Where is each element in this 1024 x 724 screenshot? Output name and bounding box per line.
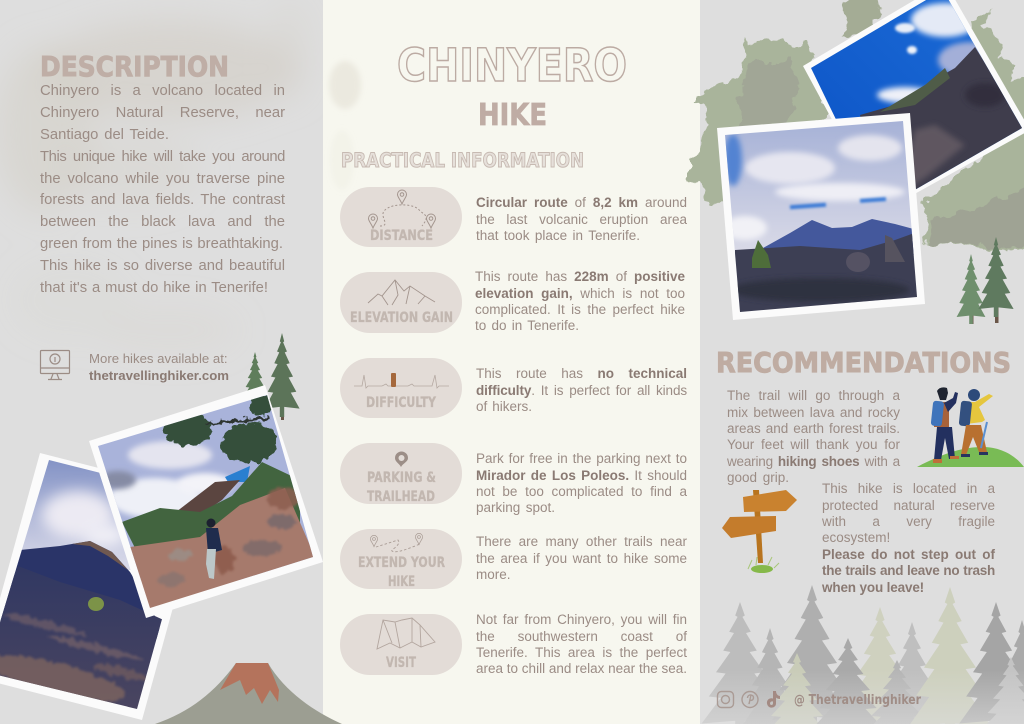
text block: parking: not be too complicated to find a bbox=[476, 484, 687, 499]
small pines: left bbox=[243, 333, 300, 420]
social handle: @ Thetravellinghiker bbox=[794, 692, 921, 708]
pill: distance: DISTANCE bbox=[370, 228, 433, 244]
background tree: upper left canopy bbox=[690, 38, 830, 206]
pill: elevation gain: ELEVATION GAIN bbox=[350, 310, 453, 326]
text block: difficulty: of hikers. bbox=[476, 399, 532, 414]
icon: pinterest bbox=[742, 692, 758, 708]
text block: parking: Park for free in the parking next to bbox=[476, 451, 687, 466]
pill: elevation gain bbox=[340, 272, 462, 333]
text block: difficulty: difficulty. It is perfect for all kinds bbox=[476, 382, 687, 398]
text block: elevation gain: to do in Tenerife. bbox=[475, 318, 579, 333]
text block: elevation gain: complicated. It is the perfect hike bbox=[475, 302, 685, 317]
text block: description: green from the pines is breathtaking. bbox=[40, 236, 283, 252]
text block: description: This hike is so diverse and beautiful bbox=[40, 258, 285, 274]
text block: more hikes link: More hikes available at: bbox=[89, 351, 228, 366]
text block: elevation gain: elevation gain, which is not too bbox=[475, 286, 685, 300]
text block: parking bbox=[476, 451, 687, 515]
icon: wooden signpost bbox=[722, 490, 797, 573]
text block: distance: Circular route of 8,2 km around bbox=[476, 195, 687, 210]
text block: protected reserve recommendation: ecosystem! bbox=[822, 530, 890, 545]
icon: monitor bbox=[40, 350, 70, 380]
text block: elevation gain bbox=[475, 269, 685, 333]
photo: lava field and Teide bbox=[717, 113, 925, 320]
pill: extend your hike bbox=[340, 529, 462, 590]
text block: description: that it's a must do hike in Tenerife! bbox=[40, 280, 268, 296]
pill: extend your hike: HIKE bbox=[388, 574, 415, 590]
icon: tiktok bbox=[767, 691, 780, 708]
text block: hiking shoes recommendation bbox=[727, 388, 900, 485]
text block: more hikes link: thetravellinghiker.com bbox=[89, 368, 229, 382]
panel: centre background bbox=[323, 0, 700, 724]
pill: difficulty bbox=[340, 358, 462, 418]
illustration: volcano bbox=[155, 663, 342, 724]
text block: description bbox=[40, 83, 285, 296]
icon: hikers on a hill bbox=[917, 387, 1024, 467]
text block: visit: the southwestern coast of bbox=[476, 628, 687, 644]
text block: difficulty bbox=[476, 366, 687, 414]
text block: hiking shoes recommendation: The trail will go through a bbox=[727, 388, 900, 403]
text block: more hikes link bbox=[89, 351, 229, 382]
title: Chinyero: CHINYERO bbox=[397, 39, 627, 92]
text block: description: forests and lava fields. The contrast bbox=[40, 192, 285, 208]
subtitle: hike: HIKE bbox=[478, 98, 547, 133]
text block: difficulty: This route has no technical bbox=[476, 366, 687, 381]
text block: extend your hike: There are many other trails near bbox=[476, 534, 687, 549]
text block: distance: that took place in Tenerife. bbox=[476, 228, 640, 243]
text block: visit: area to chill and relax near the sea. bbox=[476, 661, 687, 676]
background tree: right canopy bbox=[920, 10, 1024, 250]
watercolour stain: centre panel corner bbox=[329, 61, 361, 190]
pill: parking and trailhead: TRAILHEAD bbox=[367, 489, 435, 505]
pill: difficulty: DIFFICULTY bbox=[366, 395, 437, 411]
text block: hiking shoes recommendation: areas and earth forest trails. bbox=[727, 421, 900, 436]
panel: left background bbox=[0, 0, 324, 724]
text block: hiking shoes recommendation: Your feet will thank you for bbox=[727, 437, 900, 452]
heading: description: DESCRIPTION bbox=[40, 51, 229, 83]
text block: description: This unique hike will take you around bbox=[40, 149, 285, 165]
text block: protected reserve recommendation: the trails and leave no trash bbox=[822, 563, 995, 578]
text block: protected reserve recommendation: when you leave! bbox=[822, 580, 924, 595]
text block: protected reserve recommendation: with a very fragile bbox=[822, 514, 995, 529]
pill: visit bbox=[340, 614, 462, 675]
photo: hiker on red rocks bbox=[89, 380, 330, 618]
text block: description: Chinyero Natural Reserve, near bbox=[40, 105, 285, 121]
background forest: bottom right bbox=[700, 585, 1024, 724]
text block: description: between the black lava and the bbox=[40, 214, 285, 230]
pill: distance bbox=[340, 187, 462, 247]
background tree: top bbox=[843, 0, 883, 40]
text block: protected reserve recommendation: protected natural reserve bbox=[822, 498, 995, 512]
photo: blue lava slope bbox=[0, 453, 172, 720]
text block: protected reserve recommendation: Please do not step out of bbox=[822, 547, 995, 562]
pill: parking and trailhead bbox=[340, 443, 462, 505]
text block: extend your hike bbox=[476, 534, 687, 582]
text block: hiking shoes recommendation: wearing hiking shoes with a bbox=[727, 454, 900, 469]
text block: extend your hike: the area if you want to hike some bbox=[476, 550, 687, 566]
heading: recommendations: RECOMMENDATIONS bbox=[716, 347, 1011, 379]
panel: right background bbox=[700, 0, 1024, 724]
watercolour stain: description panel bbox=[1, 22, 299, 206]
text block: hiking shoes recommendation: good grip. bbox=[727, 470, 789, 485]
text block: protected reserve recommendation bbox=[822, 481, 995, 595]
pill: extend your hike: EXTEND YOUR bbox=[358, 555, 445, 571]
text block: description: Chinyero is a volcano located in bbox=[40, 83, 285, 99]
pill: parking and trailhead: PARKING & bbox=[367, 470, 436, 486]
text block: elevation gain: This route has 228m of positive bbox=[475, 269, 685, 284]
heading: practical information: PRACTICAL INFORMATION bbox=[341, 149, 584, 172]
text block: protected reserve recommendation: This hike is located in a bbox=[822, 481, 995, 496]
icon: instagram bbox=[718, 692, 734, 708]
small pines: right bbox=[957, 237, 1014, 324]
text block: visit: Not far from Chinyero, you will fin bbox=[476, 612, 687, 627]
text block: parking: Mirador de Los Poleos. It should bbox=[476, 468, 687, 482]
text block: hiking shoes recommendation: mix between lava and rocky bbox=[727, 404, 900, 420]
text block: visit bbox=[476, 612, 687, 676]
text block: parking: parking spot. bbox=[476, 500, 555, 515]
text block: description: the volcano while you traverse pine bbox=[40, 171, 285, 187]
pill: visit: VISIT bbox=[386, 655, 416, 671]
text block: distance: the last volcanic eruption area bbox=[476, 212, 687, 226]
text block: extend your hike: more. bbox=[476, 567, 511, 582]
text block: visit: Tenerife. This area is the perfect bbox=[476, 645, 687, 660]
photo: blue sky and lava slope bbox=[803, 0, 1024, 193]
text block: description: Santiago del Teide. bbox=[40, 127, 169, 143]
text block: distance bbox=[476, 195, 687, 243]
